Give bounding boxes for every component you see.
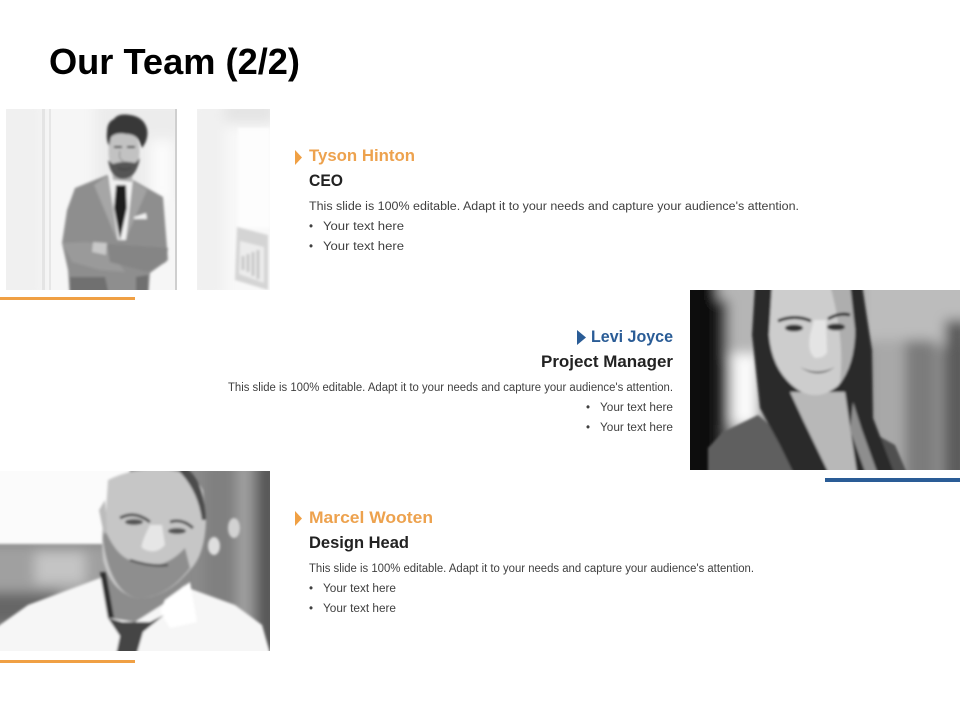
bullet list: • xyxy=(586,402,590,414)
description: This slide is 100% editable. Adapt it to your needs and capture your audience's attention. xyxy=(309,201,799,213)
name: Marcel Wooten xyxy=(309,509,433,527)
bullet list: Your text here xyxy=(323,583,396,595)
name: Tyson Hinton xyxy=(309,147,415,165)
bullet list: • xyxy=(309,583,313,595)
accent bar xyxy=(825,478,960,482)
title: Our Team (2/2) xyxy=(49,41,300,82)
accent bar xyxy=(0,297,135,300)
bullet list: • xyxy=(309,241,313,253)
photo: Levi Joyce xyxy=(690,290,960,470)
bullet list: Your text here xyxy=(323,603,396,615)
bullet list: Your text here xyxy=(323,221,404,233)
description: This slide is 100% editable. Adapt it to your needs and capture your audience's attention. xyxy=(309,563,754,575)
role: CEO xyxy=(309,172,343,190)
accent bar xyxy=(0,660,135,663)
name: Levi Joyce xyxy=(591,328,673,346)
photo: Marcel Wooten xyxy=(0,471,270,651)
bullet list xyxy=(309,583,396,615)
arrow marker xyxy=(577,330,586,345)
description: This slide is 100% editable. Adapt it to your needs and capture your audience's attention. xyxy=(228,382,673,394)
bullet list xyxy=(586,402,673,434)
bullet list: Your text here xyxy=(600,422,673,434)
role: Design Head xyxy=(309,534,409,552)
role: Project Manager xyxy=(541,353,674,371)
panel: Tyson Hinton xyxy=(0,100,799,300)
bullet list: • xyxy=(309,221,313,233)
bullet list: Your text here xyxy=(600,402,673,414)
arrow marker xyxy=(295,511,302,526)
panel: Marcel Wooten xyxy=(0,460,754,663)
photo: Tyson Hinton xyxy=(6,109,270,290)
panel: Levi Joyce xyxy=(228,275,960,485)
bullet list: • xyxy=(309,603,313,615)
bullet list: Your text here xyxy=(323,241,404,253)
bullet list: • xyxy=(586,422,590,434)
bullet list xyxy=(309,221,404,253)
arrow marker xyxy=(295,150,302,165)
